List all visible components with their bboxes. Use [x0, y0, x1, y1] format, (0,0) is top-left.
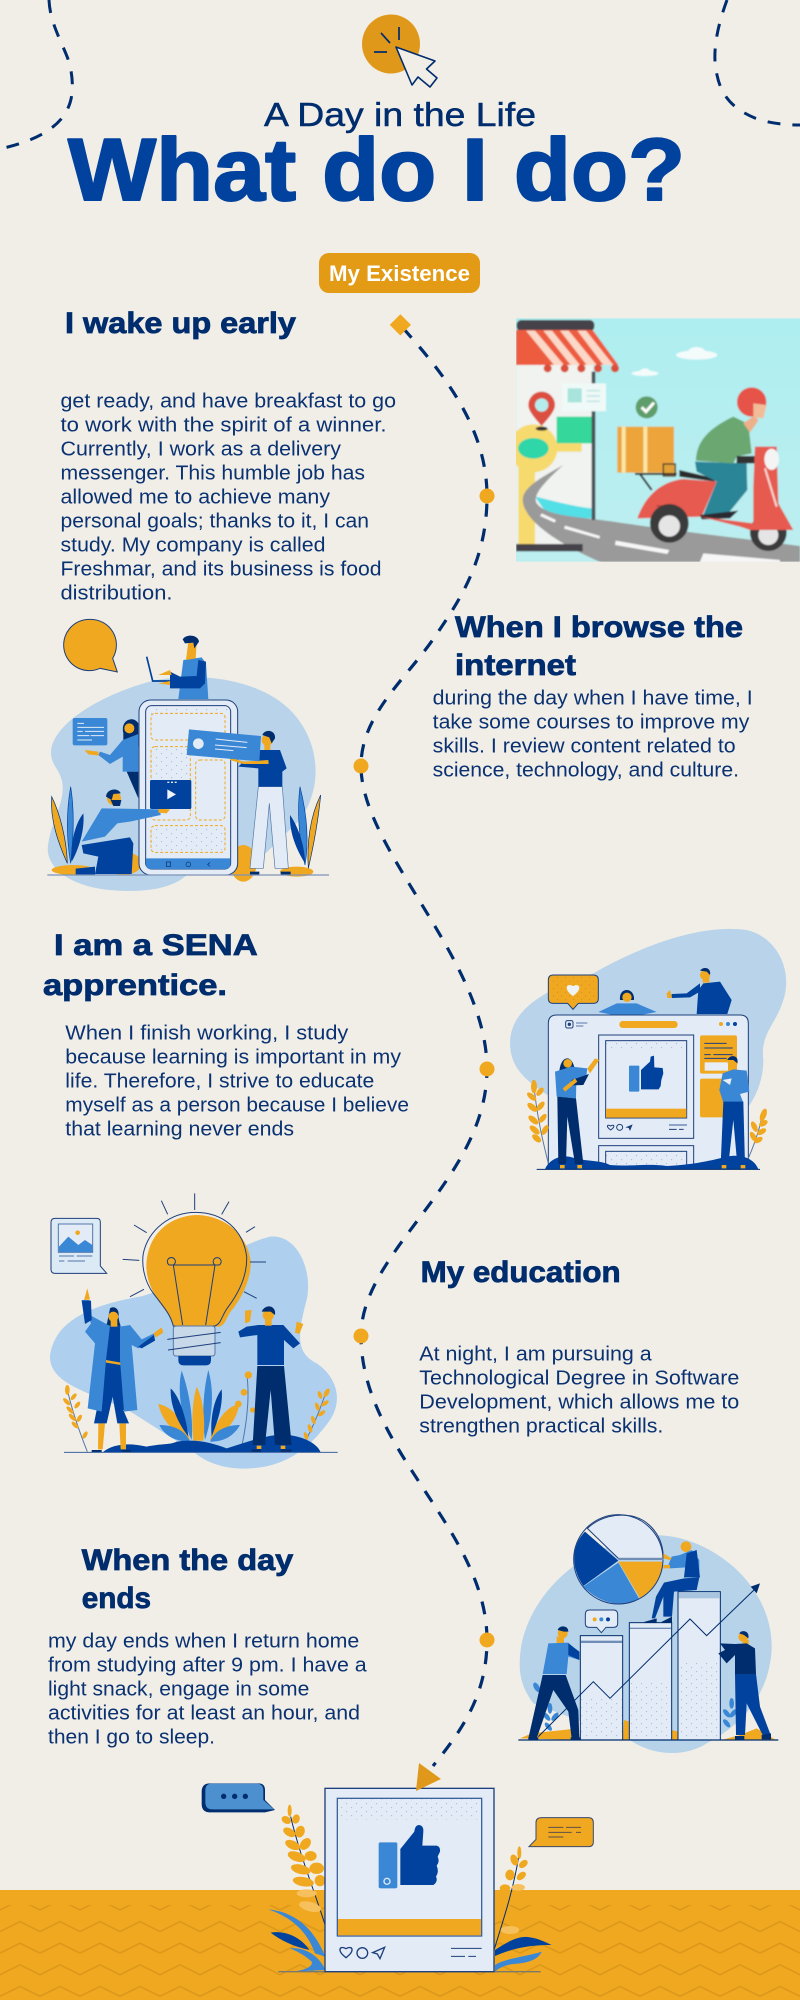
- section 5 text: activities for at least an hour, and: [48, 1702, 360, 1724]
- section 2 heading: [455, 611, 743, 682]
- left leaves: [268, 1909, 325, 1972]
- plants: [526, 1080, 769, 1163]
- chat bubble: [585, 1610, 618, 1633]
- orange side plants: [62, 1371, 331, 1452]
- section 3 text: that learning never ends: [65, 1118, 294, 1140]
- ground line: [64, 1451, 338, 1454]
- badge: My Existence: [319, 253, 480, 293]
- section 1 text: allowed me to achieve many: [60, 486, 330, 508]
- section 3 heading: I am a SENA: [54, 929, 258, 962]
- section 4 text: Development, which allows me to: [419, 1391, 739, 1413]
- woman and blue note: [73, 718, 138, 798]
- section 5 text: [48, 1630, 368, 1748]
- timeline start diamond: [390, 314, 411, 335]
- right wheat plant: [494, 1846, 529, 1950]
- section 1 heading: I wake up early: [65, 307, 296, 340]
- section 3 heading: apprentice.: [43, 969, 227, 1002]
- section 2 text: take some courses to improve my: [433, 711, 749, 733]
- plants: [51, 787, 321, 868]
- timeline dots: [354, 488, 494, 1648]
- section 5 text: my day ends when I return home: [48, 1630, 359, 1652]
- heart bubble: [548, 975, 598, 1009]
- title: A Day in the Life: A Day in the Life: [264, 96, 536, 133]
- ground line: [537, 1168, 760, 1171]
- right man with card: [187, 729, 291, 875]
- section 2 text: [433, 687, 753, 781]
- top man: [667, 968, 732, 1014]
- ground mound: [103, 1435, 321, 1452]
- section 1 text: [60, 390, 396, 604]
- section 5 text: light snack, engage in some: [48, 1678, 309, 1700]
- section 3 heading: [43, 929, 258, 1002]
- title: What do I do?: What do I do?: [68, 120, 685, 219]
- section 1 text: personal goals; thanks to it, I can: [60, 510, 369, 532]
- section 2 heading: internet: [455, 649, 576, 682]
- section 2 text: during the day when I have time, I: [433, 687, 753, 709]
- left man: [528, 1626, 581, 1740]
- footer band with zigzag pattern: [0, 1890, 800, 2000]
- trend arrow: [538, 1583, 760, 1737]
- section 5 text: from studying after 9 pm. I have a: [48, 1654, 368, 1676]
- top man with laptop: [147, 636, 208, 699]
- pie chart: [574, 1515, 663, 1604]
- arrow head: timeline end: [416, 1763, 441, 1791]
- section 4 text: At night, I am pursuing a: [419, 1343, 653, 1365]
- section 1 text: Currently, I work as a delivery: [60, 438, 341, 460]
- section 3 text: [65, 1022, 409, 1140]
- woman in coat: [82, 1288, 163, 1452]
- left woman: [555, 1058, 599, 1168]
- picture bubble: [51, 1218, 107, 1273]
- section 4 text: [419, 1343, 739, 1437]
- picture: delivery scooter and phone map: [509, 317, 800, 563]
- section 1 text: Freshmar, and its business is food: [60, 558, 382, 580]
- section 5 heading: ends: [82, 1582, 151, 1615]
- speech bubble: [64, 619, 117, 672]
- blue chat bubble: [202, 1783, 275, 1812]
- section 3 text: When I finish working, I study: [65, 1022, 348, 1044]
- second post: [599, 1146, 694, 1169]
- left wheat plant: [280, 1805, 327, 1930]
- badge: My Existence: My Existence: [329, 261, 470, 286]
- ground mounds: [545, 1156, 758, 1169]
- man celebrating: [238, 1306, 303, 1452]
- light bulb: [123, 1193, 266, 1365]
- right man: [719, 1056, 749, 1168]
- video card: [150, 780, 191, 809]
- section 5 heading: [82, 1544, 294, 1615]
- illustration: social media like page: [510, 929, 786, 1169]
- seated man: [644, 1541, 700, 1623]
- right leaves: [495, 1937, 552, 1972]
- ground line: [278, 1970, 541, 1974]
- dashed corner curve: top right: [715, 0, 800, 125]
- top woman: [598, 990, 657, 1015]
- illustration: chart with team: [518, 1515, 778, 1753]
- orange note bubble: [529, 1818, 593, 1847]
- dashed timeline path: [361, 328, 487, 1766]
- illustration: people and light bulb: [50, 1193, 338, 1469]
- section 1 text: distribution.: [60, 582, 172, 604]
- bars: [580, 1592, 720, 1740]
- section 4 text: Technological Degree in Software: [419, 1367, 739, 1389]
- phone: [139, 700, 238, 875]
- ground line: [518, 1738, 778, 1742]
- section 2 text: science, technology, and culture.: [433, 759, 739, 781]
- side cards: [700, 1035, 737, 1117]
- section 3 text: myself as a person because I believe: [65, 1094, 409, 1116]
- section 1 text: to work with the spirit of a winner.: [60, 414, 386, 436]
- ground mounds: [52, 845, 313, 882]
- illustration: people building a phone app: [47, 619, 329, 891]
- post with thumbs up: [599, 1035, 694, 1138]
- section 5 text: then I go to sleep.: [48, 1726, 215, 1748]
- illustration: like post with plants: [202, 1783, 593, 1972]
- section 2 text: skills. I review content related to: [433, 735, 736, 757]
- section 1 text: messenger. This humble job has: [60, 462, 365, 484]
- right man: [718, 1631, 771, 1740]
- section 1 text: study. My company is called: [60, 534, 326, 556]
- section 4 heading: My education: [421, 1256, 621, 1289]
- browser window: [548, 1015, 748, 1168]
- small plants: [532, 1681, 738, 1732]
- section 2 heading: When I browse the: [455, 611, 743, 644]
- dashed corner curve: top left: [0, 0, 72, 149]
- section 1 text: get ready, and have breakfast to go: [60, 390, 396, 412]
- ground line: [47, 873, 329, 877]
- section 3 text: because learning is important in my: [65, 1046, 401, 1068]
- section 3 text: life. Therefore, I strive to educate: [65, 1070, 374, 1092]
- section 5 heading: When the day: [82, 1544, 294, 1577]
- icon: click cursor: [362, 14, 437, 87]
- center plant: [158, 1370, 240, 1442]
- post card: [325, 1788, 494, 1972]
- kneeling man: [76, 790, 170, 875]
- section 4 text: strengthen practical skills.: [419, 1415, 663, 1437]
